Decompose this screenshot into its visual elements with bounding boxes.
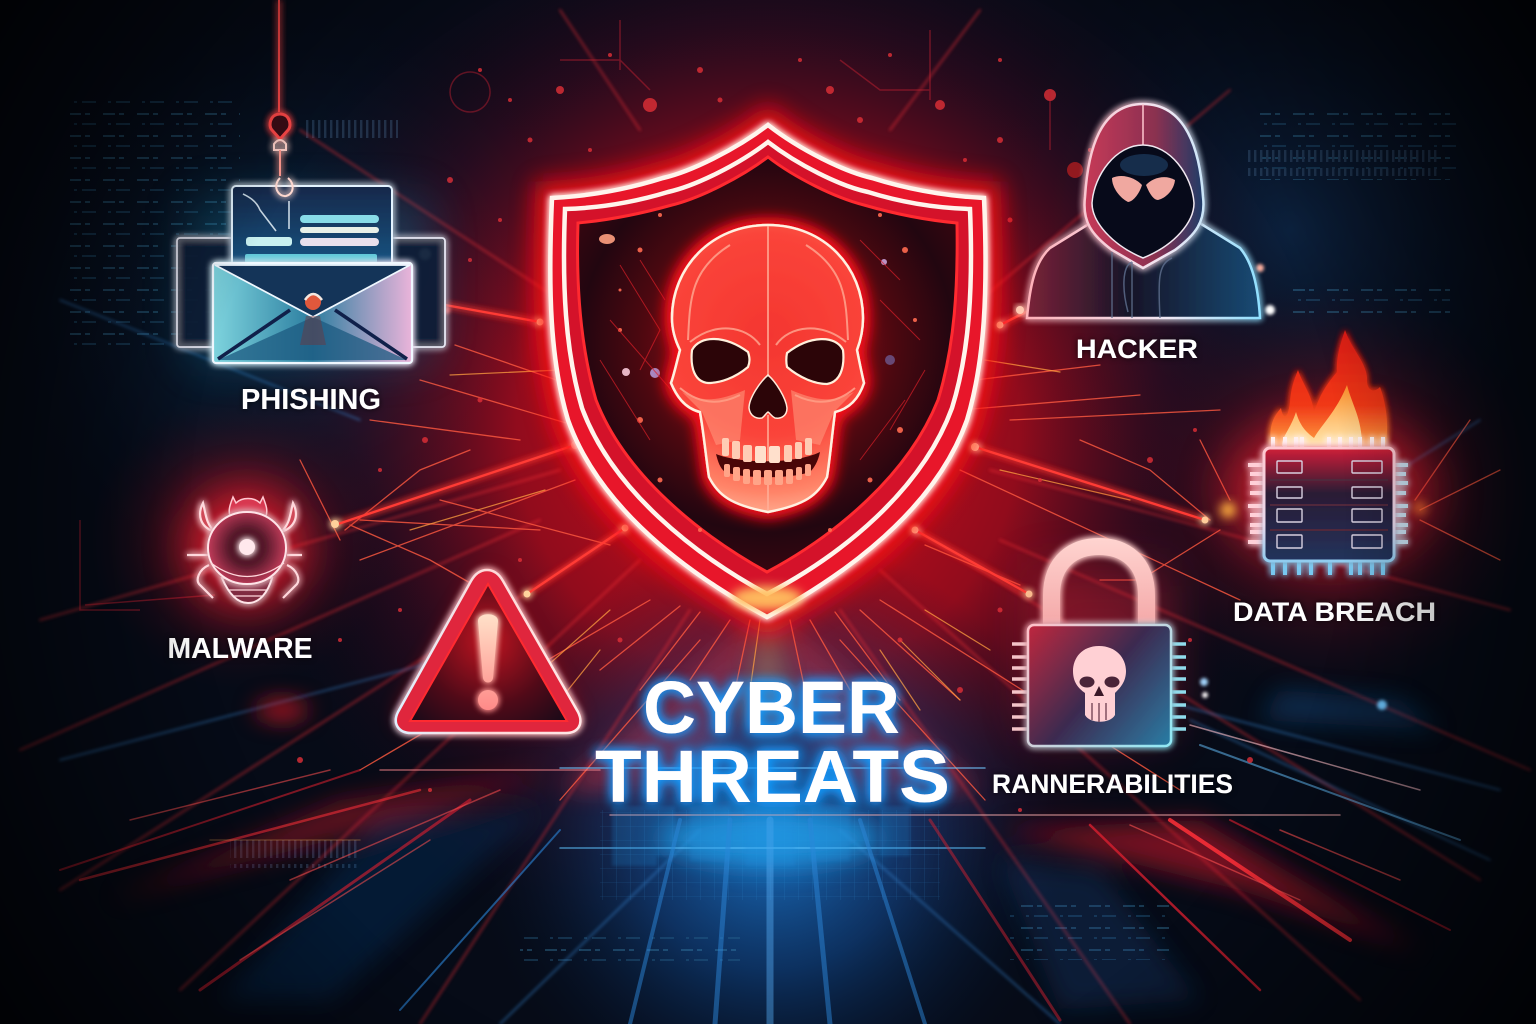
scattered sparks and particles: [80, 20, 1387, 812]
inner flames: [1282, 385, 1362, 446]
bug belly bands: [211, 563, 284, 596]
glow node: [1016, 306, 1024, 314]
triangle glow: [398, 572, 578, 722]
title line 2: THREATS: [595, 735, 950, 818]
bug head: [229, 497, 267, 516]
triangle dark interior: [410, 584, 567, 721]
label: data breach: DATA BREACH: [1233, 597, 1436, 627]
chip slots: [1277, 461, 1382, 548]
bug eye: [239, 539, 255, 555]
lower teeth: [724, 464, 811, 485]
perspective floor streaks: [60, 690, 1460, 1024]
padlock icon: [1012, 546, 1186, 746]
chip body: [1264, 448, 1394, 561]
shield inner white rim: [564, 142, 971, 594]
bug lower shell: [222, 578, 272, 603]
side pins: [1012, 644, 1028, 729]
glow: [191, 492, 303, 604]
fishing line and hook: [270, 0, 293, 196]
mouth: [716, 452, 820, 477]
label: phishing: PHISHING: [241, 384, 381, 416]
triangle outer band: [396, 570, 580, 733]
letter sheet: [232, 186, 392, 266]
body: [1027, 222, 1260, 318]
brow and cheek highlights: [680, 226, 855, 510]
left eye: [1112, 176, 1142, 202]
mask highlight: [1120, 154, 1168, 176]
warning triangle icon: [396, 570, 580, 733]
small hacker figure: [300, 294, 326, 345]
padlock glow: [1030, 570, 1170, 730]
envelope body: [213, 263, 412, 363]
bug legs and horns: [187, 503, 302, 598]
title line 1: CYBER: [643, 666, 900, 749]
connector lines to threat icons: [331, 305, 1208, 598]
title: [595, 666, 950, 818]
malware bug icon: [187, 492, 303, 604]
hood: [1084, 104, 1203, 268]
shield dark interior: [578, 157, 957, 572]
icon glow: [190, 200, 430, 360]
skull: [671, 225, 864, 512]
chip separators: [1270, 480, 1388, 530]
lock skull: [1073, 646, 1126, 722]
label: hacker: HACKER: [1076, 334, 1198, 364]
nose cavity: [749, 375, 787, 418]
envelope lower fold: [218, 317, 407, 360]
title reflection: [612, 806, 910, 866]
chip pins: [1248, 437, 1408, 575]
shackle: [1052, 546, 1146, 626]
exclamation mark: [478, 614, 498, 710]
left eye socket: [692, 339, 750, 383]
label: malware: MALWARE: [168, 633, 312, 665]
data breach chip with flames: [1220, 330, 1435, 575]
phishing envelope icon: [177, 0, 445, 363]
lock body: [1028, 625, 1171, 746]
side sparks: [1220, 502, 1426, 518]
chip glow: [1225, 420, 1435, 560]
hoodie strings: [1112, 252, 1172, 318]
shield base flare: [731, 586, 803, 610]
flames: [1270, 330, 1387, 446]
skull outline and bone: [671, 225, 864, 512]
upper teeth: [722, 438, 812, 463]
label: vulnerabilities: RANNERABILITIES: [992, 769, 1233, 799]
right eye: [1146, 177, 1175, 200]
shield glow halo: [550, 125, 986, 617]
background data patterns: [70, 95, 1460, 970]
envelope fold lines: [218, 310, 407, 359]
shield debris sparks: [599, 213, 917, 532]
back panel: [177, 238, 445, 347]
face opening: [1092, 145, 1194, 258]
shield outer band: [550, 125, 986, 617]
hood seam: [1142, 104, 1144, 145]
letter content lines: [243, 194, 379, 263]
hacker icon: [1016, 104, 1260, 318]
shield with skull: [550, 125, 986, 617]
bug body: [208, 512, 286, 584]
right eye socket: [786, 339, 843, 384]
envelope flap: [215, 265, 410, 317]
